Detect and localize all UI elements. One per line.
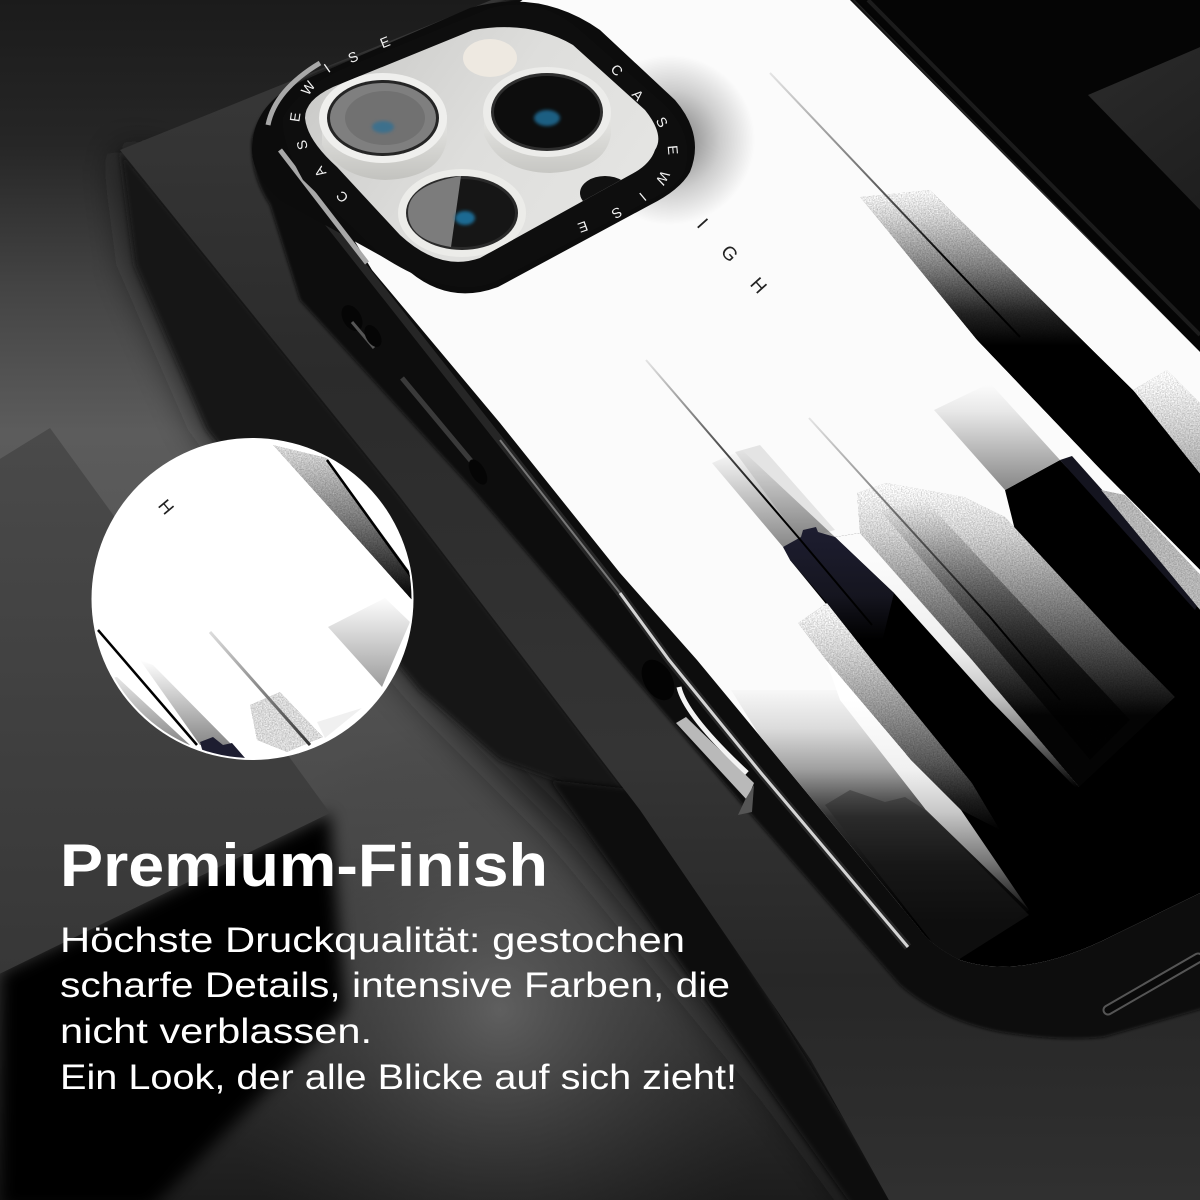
text: CASEWISE lettering right: C xyxy=(608,61,626,79)
inset: gray gradient block xyxy=(328,598,410,687)
text: CASEWISE lettering right: E xyxy=(576,218,590,236)
inset: left stripes xyxy=(98,630,245,760)
stripe: white strip fading to gray xyxy=(835,533,1079,787)
stripe: central black field xyxy=(790,460,1200,1000)
camera bump xyxy=(252,2,695,293)
text: CASEWISE lettering left: S xyxy=(345,48,361,66)
magnifier inset circle xyxy=(90,435,420,765)
icon: charging port xyxy=(1108,958,1198,1010)
icon: sensor dot xyxy=(580,176,621,201)
text: CASEWISE lettering left: I xyxy=(321,60,333,76)
text: CASEWISE lettering right: A xyxy=(629,86,648,104)
body text: nicht verblassen. xyxy=(60,1012,372,1051)
text: CASEWISE lettering left: C xyxy=(333,188,351,206)
text: CASEWISE lettering right: W xyxy=(652,168,673,188)
text: CASEWISE lettering left: W xyxy=(298,77,319,98)
text: CASEWISE lettering left: S xyxy=(293,138,311,152)
text: CASEWISE lettering right: S xyxy=(609,204,625,222)
text: CASEWISE lettering right xyxy=(576,61,681,236)
outer rim xyxy=(252,2,695,293)
text: CASEWISE lettering right: S xyxy=(653,114,671,130)
shadow from camera bump xyxy=(638,62,748,218)
icon: side button xyxy=(635,654,754,815)
text: CASEWISE lettering left xyxy=(286,33,392,206)
inset: grainy dark band xyxy=(273,445,412,600)
text: CASEWISE lettering right: I xyxy=(636,190,650,204)
stripe: white band with grain xyxy=(1101,490,1200,622)
body text: Ein Look, der alle Blicke auf sich zieht! xyxy=(60,1058,737,1097)
text: HIGH vertical lettering: G xyxy=(716,241,742,267)
stripe: gray gradient block xyxy=(934,396,1060,490)
icon: volume and action buttons xyxy=(337,301,491,488)
stripe: thin line left xyxy=(646,360,872,625)
stripe: thin line right xyxy=(770,73,1020,337)
phone back print: abstract stripes xyxy=(354,0,1200,967)
stripe: grainy central band xyxy=(857,483,1175,787)
phone case body xyxy=(252,0,1200,1039)
clear camera window xyxy=(305,27,658,262)
title: Premium-Finish xyxy=(60,832,548,899)
body text xyxy=(60,921,737,1097)
stripe: left gray block with navy steps xyxy=(712,445,894,660)
icon: lens three xyxy=(398,169,526,257)
inset: grainy line band xyxy=(210,632,362,752)
side highlights and buttons xyxy=(320,0,1200,1010)
body text: Höchste Druckqualität: gestochen xyxy=(60,921,685,960)
text: CASEWISE lettering right: E xyxy=(665,145,681,155)
text: HIGH vertical lettering xyxy=(697,218,767,294)
stripe: lower fading bands xyxy=(736,696,1012,959)
body text: scharfe Details, intensive Farben, die xyxy=(60,966,730,1005)
inset: letter H: H xyxy=(154,496,178,518)
black lettered ring xyxy=(283,4,688,287)
stripe: thin line middle xyxy=(809,418,1060,700)
text: HIGH vertical lettering: H xyxy=(745,274,770,298)
icon: lens one xyxy=(319,73,447,180)
stripe: grainy lower band xyxy=(798,603,1000,830)
text: HIGH vertical lettering: I xyxy=(692,215,711,233)
text: CASEWISE lettering left: A xyxy=(310,163,329,180)
text: CASEWISE lettering left: E xyxy=(286,111,304,123)
icon: lens two xyxy=(483,67,611,173)
text: CASEWISE lettering left: E xyxy=(378,33,392,51)
stripe: upper black band xyxy=(860,190,1200,580)
icon: flash xyxy=(463,39,517,77)
